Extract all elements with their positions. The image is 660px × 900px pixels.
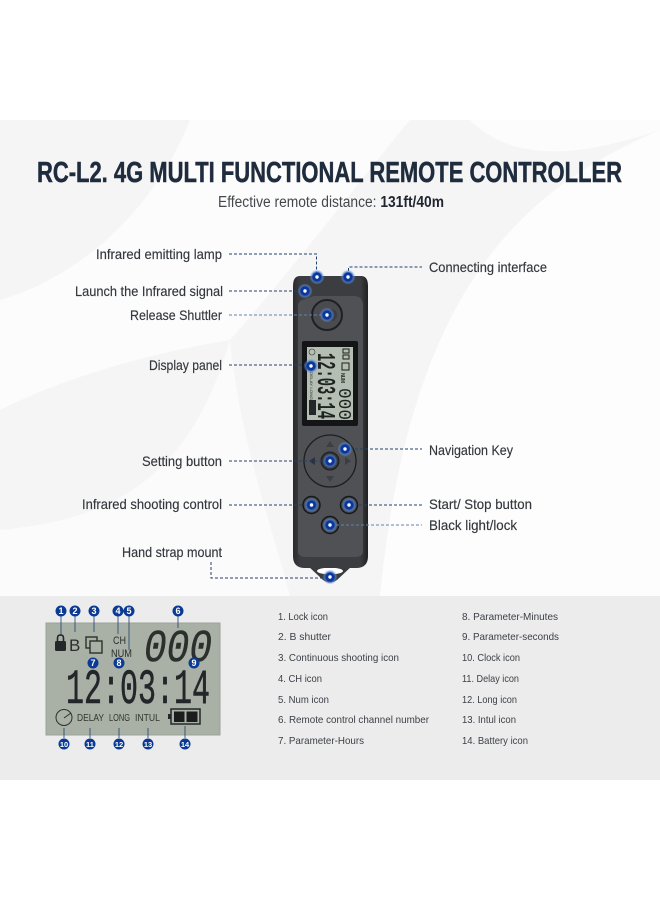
callout: navigation key xyxy=(338,442,513,458)
panel: LCD legend background xyxy=(0,596,660,780)
remote controller device xyxy=(293,276,368,582)
callout: release shutter: Release Shuttler xyxy=(130,307,222,323)
legend list: column one: 4. CH icon xyxy=(278,673,322,685)
callout: navigation key: Navigation Key xyxy=(429,442,513,458)
numbered markers: 8 xyxy=(116,658,122,668)
legend list: column two: 14. Battery icon xyxy=(462,735,528,747)
subtitle: Effective remote distance: 131ft/40m xyxy=(218,194,444,211)
lock icon xyxy=(55,635,66,651)
background panel xyxy=(0,120,660,596)
callout: display panel xyxy=(149,357,318,374)
legend list: column two: 8. Parameter-Minutes xyxy=(462,611,558,623)
legend list: column one: 7. Parameter-Hours xyxy=(278,735,364,747)
channel readout: 000 xyxy=(144,624,212,675)
legend list: column two xyxy=(462,611,559,747)
LCD screen xyxy=(46,623,220,735)
numbered markers: 3 xyxy=(91,606,97,616)
strap mount xyxy=(308,566,352,582)
numbered markers: 13 xyxy=(144,740,152,749)
numbered markers: 14 xyxy=(181,740,190,749)
callout: infrared emitting lamp xyxy=(96,246,324,284)
CH icon: CH xyxy=(113,635,126,647)
clock indicator xyxy=(309,349,315,355)
rotated small labels: DELAY LONG xyxy=(309,372,314,400)
legend list: column one xyxy=(278,611,429,747)
callout: black light lock xyxy=(322,517,518,533)
callout: start stop button xyxy=(342,496,532,512)
panel: LCD diagram xyxy=(46,606,220,750)
function buttons xyxy=(303,496,358,534)
navigation ring xyxy=(304,435,356,487)
callout: infrared shooting control xyxy=(82,496,319,512)
numbered markers: 12 xyxy=(115,740,123,749)
callout: black light lock: Black light/lock xyxy=(429,517,518,533)
rotated LCD readout: 12:03:14 xyxy=(310,353,340,419)
callout: hand strap mount: Hand strap mount xyxy=(122,544,222,560)
rotated icon labels: NUM xyxy=(339,373,345,383)
INTUL label: INTUL xyxy=(135,712,160,724)
legend list: column two: 12. Long icon xyxy=(462,694,517,706)
callout: launch the infrared signal xyxy=(75,283,312,299)
time readout: 12:03:14 xyxy=(66,662,210,718)
legend list: column two: 10. Clock icon xyxy=(462,652,520,664)
clock icon xyxy=(56,710,72,726)
numbered markers: 9 xyxy=(191,658,197,668)
legend list: column two: 13. Intul icon xyxy=(462,714,516,726)
numbered markers: 4 xyxy=(115,606,121,616)
legend list: column one: 2. B shutter xyxy=(278,631,331,643)
legend list: column two: 9. Parameter-seconds xyxy=(462,631,559,643)
B shutter icon: B xyxy=(69,636,80,655)
callout: connecting interface xyxy=(340,259,547,284)
callout: setting button: Setting button xyxy=(142,453,222,469)
callout: connecting interface: Connecting interface xyxy=(429,259,547,275)
numbered markers: 6 xyxy=(175,606,181,616)
DELAY label: DELAY xyxy=(77,712,104,724)
NUM icon: NUM xyxy=(111,648,132,660)
callout: launch the infrared signal: Launch the Infrared signal xyxy=(75,283,223,299)
marker leader lines xyxy=(61,616,185,738)
callout: infrared shooting control: Infrared shooting control xyxy=(82,496,222,512)
device body xyxy=(293,276,368,568)
lock and B icons xyxy=(342,349,349,370)
callout: hand strap mount xyxy=(122,544,338,584)
numbered markers: 5 xyxy=(126,606,132,616)
legend list: column one: 5. Num icon xyxy=(278,694,329,706)
numbered markers: 11 xyxy=(86,740,94,749)
legend list: column one: 1. Lock icon xyxy=(278,611,328,623)
continuous shooting icon xyxy=(86,637,102,653)
callout: release shutter xyxy=(130,307,334,323)
callout: display panel: Display panel xyxy=(149,357,222,373)
shutter button xyxy=(312,300,342,330)
rotated channel readout: 000 xyxy=(333,388,353,420)
numbered markers: 7 xyxy=(90,658,96,668)
numbered markers: 10 xyxy=(60,740,68,749)
callout: start stop button: Start/ Stop button xyxy=(429,496,532,512)
battery icon xyxy=(168,709,200,724)
legend list: column two: 11. Delay icon xyxy=(462,673,519,685)
LONG label: LONG xyxy=(109,712,130,724)
callout: infrared emitting lamp: Infrared emitting lamp xyxy=(96,246,222,262)
numbered markers xyxy=(56,606,200,750)
legend list: column one: 3. Continuous shooting icon xyxy=(278,652,399,664)
battery indicator xyxy=(309,400,316,415)
front face xyxy=(298,296,363,557)
numbered markers: 1 xyxy=(58,606,64,616)
display panel xyxy=(302,341,358,426)
legend list: column one: 6. Remote control channel number xyxy=(278,714,429,726)
callout: setting button xyxy=(142,453,338,469)
numbered markers: 2 xyxy=(72,606,78,616)
